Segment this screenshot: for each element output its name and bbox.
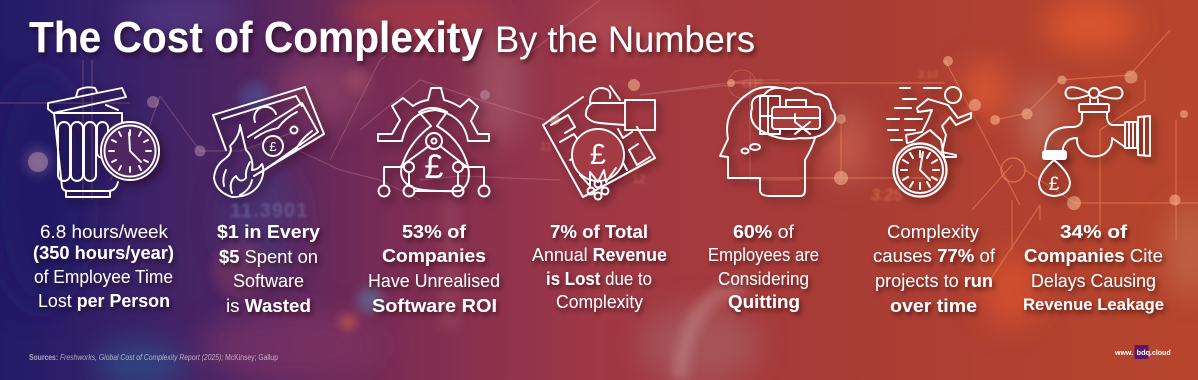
stat: software waste: is Wasted <box>226 295 311 316</box>
stat: employee time lost <box>33 221 174 311</box>
stat: employees quitting: 60% of <box>733 221 795 242</box>
stat: revenue lost: is Lost due to <box>546 268 652 289</box>
stat: employee time lost: Lost per Person <box>38 290 170 311</box>
icon: maze money bag <box>543 86 655 200</box>
background chart figures: COT <box>742 79 763 90</box>
stat: projects over time: causes 77% of <box>873 245 996 266</box>
icon: maze money bag: £ <box>590 139 606 171</box>
stat: employee time lost: 6.8 hours/week <box>40 221 169 242</box>
stat: software waste: Software <box>233 270 304 291</box>
icon: burning banknotes: £ <box>269 139 277 154</box>
stat: projects over time: Complexity <box>887 221 980 242</box>
icon: tap dripping pound <box>1039 87 1150 196</box>
icon: tap dripping pound: £ <box>1049 174 1060 195</box>
stat: revenue leakage <box>1023 221 1164 314</box>
stat: projects over time: over time <box>890 295 977 316</box>
stat: unrealised ROI: Companies <box>382 245 486 266</box>
background chart figures: 3:25 <box>871 187 902 204</box>
logo: website <box>1114 345 1171 359</box>
stat: unrealised ROI: Software ROI <box>372 295 497 316</box>
logo: website: www. <box>1114 350 1133 357</box>
icon: running figure on clock <box>887 87 971 196</box>
stat: software waste: $5 Spent on <box>219 246 318 267</box>
title <box>29 13 755 62</box>
stat: unrealised ROI: 53% of <box>402 221 467 242</box>
background chart figures: 11.3901 <box>230 200 308 222</box>
stat: revenue lost: 7% of Total <box>550 221 648 242</box>
stat: projects over time: projects to run <box>875 270 993 291</box>
background chart figures: 12 <box>632 172 646 186</box>
stat: employees quitting <box>708 221 819 312</box>
icon: bin with clock <box>48 87 159 197</box>
stat: unrealised ROI <box>368 221 500 316</box>
stat: employee time lost: of Employee Time <box>34 266 173 287</box>
icon: gear and money bag: £ <box>425 148 444 186</box>
stat: software waste <box>217 221 321 316</box>
icon: burning banknotes <box>213 87 324 197</box>
network lines <box>0 0 1198 280</box>
stat: software waste: $1 in Every <box>217 221 321 242</box>
stat: unrealised ROI: Have Unrealised <box>368 270 500 291</box>
logo: website: bdq <box>1136 348 1151 357</box>
background chart figures: 3.10 <box>918 70 938 81</box>
stat: revenue leakage: Companies Cite <box>1024 245 1163 266</box>
stat: revenue leakage: Delays Causing <box>1031 270 1156 291</box>
title: The Cost of Complexity <box>29 13 483 62</box>
sources note: Sources: Freshworks, Global Cost of Complexity Report (2025); McKinsey; Gallup <box>29 353 278 362</box>
icon: head with thought cloud <box>720 87 835 196</box>
stat: revenue lost <box>532 221 667 312</box>
background chart figures: 11 <box>540 139 553 153</box>
background chart figures <box>230 70 938 222</box>
stat: revenue lost: Annual Revenue <box>532 244 667 265</box>
stat: revenue leakage: 34% of <box>1060 221 1128 242</box>
stat: employees quitting: Considering <box>718 268 809 289</box>
stat: revenue lost: Complexity <box>556 291 644 312</box>
logo: website: .cloud <box>1150 350 1171 357</box>
stat: employee time lost: (350 hours/year) <box>33 242 174 263</box>
stat: employees quitting: Quitting <box>728 291 800 312</box>
stat: revenue leakage: Revenue Leakage <box>1023 295 1164 314</box>
stat: projects over time <box>873 221 996 316</box>
title: By the Numbers <box>495 19 755 60</box>
stat: employees quitting: Employees are <box>708 244 819 265</box>
icon: gear and money bag <box>378 88 490 196</box>
